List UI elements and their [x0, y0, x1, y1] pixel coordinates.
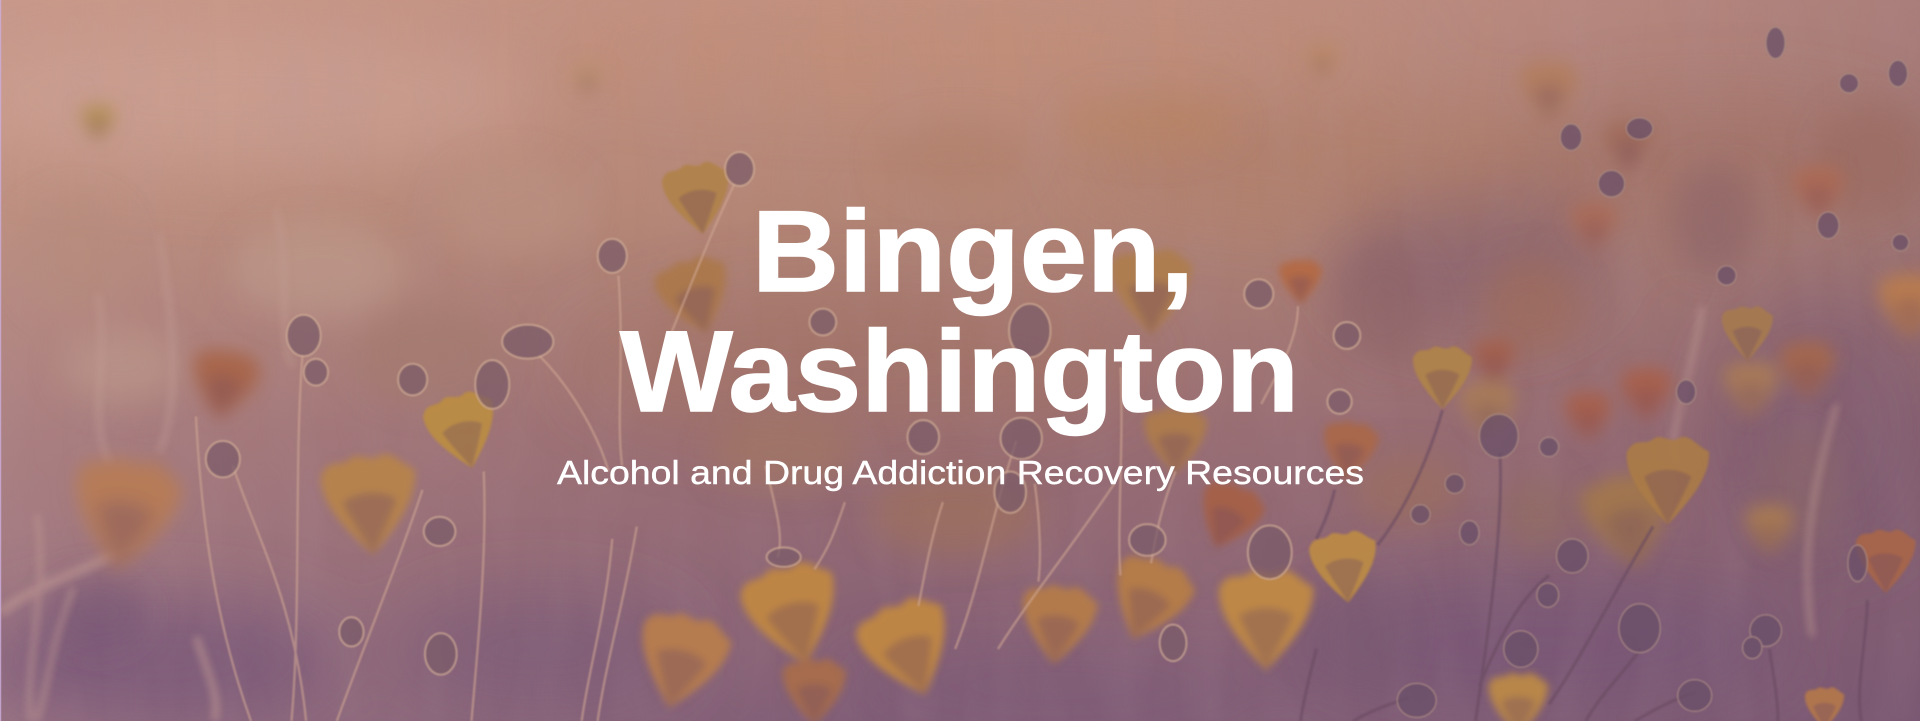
- seed buds: [206, 152, 1360, 675]
- title line: Bingen: Bingen,: [752, 188, 1194, 316]
- stems: dark backlit: [1300, 410, 1867, 721]
- title: [620, 188, 1299, 436]
- blurred stems: [0, 208, 1837, 721]
- blurred foreground flowers: [64, 45, 1920, 578]
- stems: light rim-lit: [196, 184, 1298, 721]
- mid-focus flowers: [319, 249, 1548, 721]
- subtitle: Alcohol and Drug Addiction Recovery Resources: [557, 454, 1364, 491]
- left edge hairline: [0, 0, 1, 721]
- sharp flowers: [420, 159, 1915, 721]
- title line: Washington: Washington: [620, 308, 1299, 436]
